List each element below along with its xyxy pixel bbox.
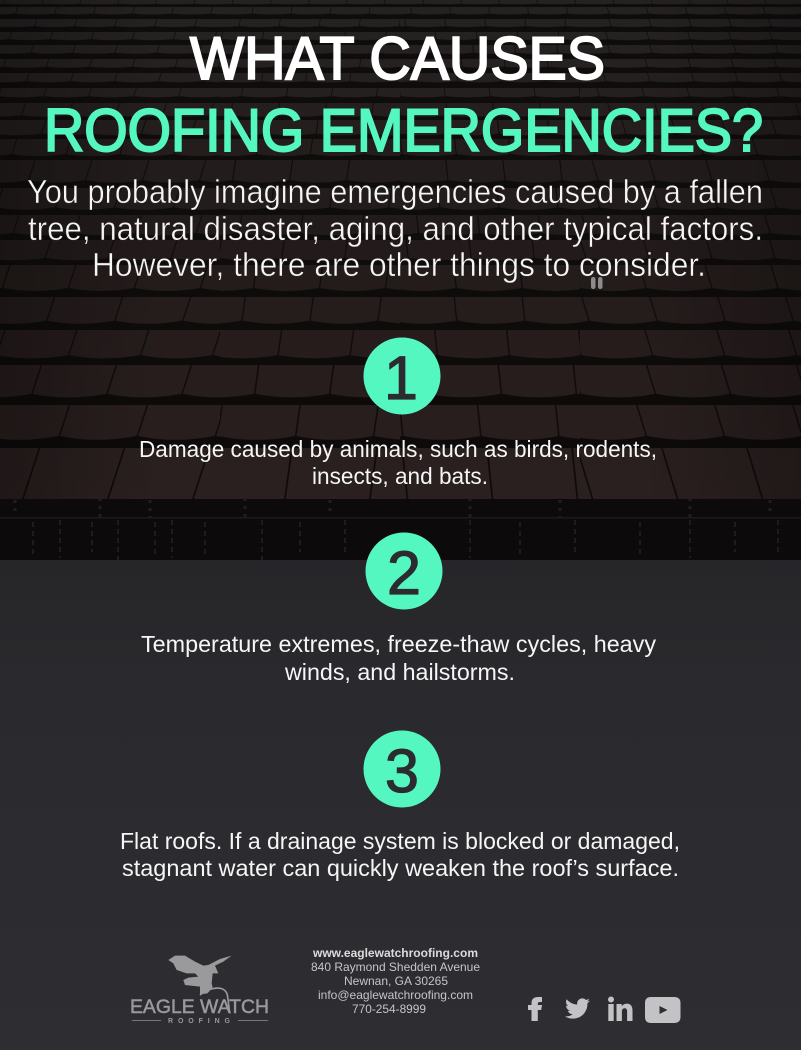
logo: eagle watch roofing: ROOFING <box>168 1018 231 1025</box>
icon: youtube <box>645 997 680 1023</box>
step 3 text: stagnant water can quickly weaken the roof’s surface. <box>122 855 679 881</box>
icon: eagle <box>168 956 232 1013</box>
icon: facebook <box>528 997 542 1021</box>
number badge 3 <box>364 730 440 808</box>
icon: linkedin <box>608 996 632 1021</box>
number badge 2 <box>366 532 442 610</box>
step 3 text: Flat roofs. If a drainage system is blocked or damaged, <box>120 828 680 854</box>
title <box>44 25 763 164</box>
contact details: info@eaglewatchroofing.com <box>318 988 473 1002</box>
number badge 2: 2 <box>387 539 421 607</box>
step 1 text: Damage caused by animals, such as birds, rodents, <box>139 436 657 462</box>
number badge 1: 1 <box>384 344 418 412</box>
contact details <box>311 946 480 1016</box>
step 1 text <box>139 436 657 489</box>
intro text: tree, natural disaster, aging, and other typical factors. <box>28 210 763 247</box>
contact details: 840 Raymond Shedden Avenue <box>311 960 480 974</box>
social icons <box>528 996 680 1023</box>
step 2 text: winds, and hailstorms. <box>284 659 515 685</box>
step 1 text: insects, and bats. <box>312 463 488 489</box>
stray quote mark <box>591 277 602 289</box>
logo: eagle watch roofing <box>130 956 269 1025</box>
step 3 text <box>120 828 680 881</box>
step 2 <box>141 532 657 685</box>
intro text: You probably imagine emergencies caused by a fallen <box>27 173 763 210</box>
step 3 <box>120 730 680 881</box>
icon: twitter <box>565 998 590 1019</box>
intro text <box>27 173 763 283</box>
title line: what causes: WHAT CAUSES <box>190 25 605 92</box>
step 1 <box>139 338 657 489</box>
logo: eagle watch roofing: EAGLE WATCH <box>130 997 269 1018</box>
number badge 1 <box>364 338 440 414</box>
number badge 3: 3 <box>385 737 419 805</box>
background: roof photo <box>0 0 801 560</box>
step 2 text: Temperature extremes, freeze-thaw cycles, heavy <box>141 631 657 657</box>
contact details: www.eaglewatchroofing.com <box>312 946 478 960</box>
contact details: 770-254-8999 <box>352 1002 426 1016</box>
title line: roofing emergencies: ROOFING EMERGENCIES? <box>44 97 763 164</box>
contact details: Newnan, GA 30265 <box>344 974 448 988</box>
intro text: However, there are other things to consider. <box>92 246 706 283</box>
step 2 text <box>141 631 657 685</box>
